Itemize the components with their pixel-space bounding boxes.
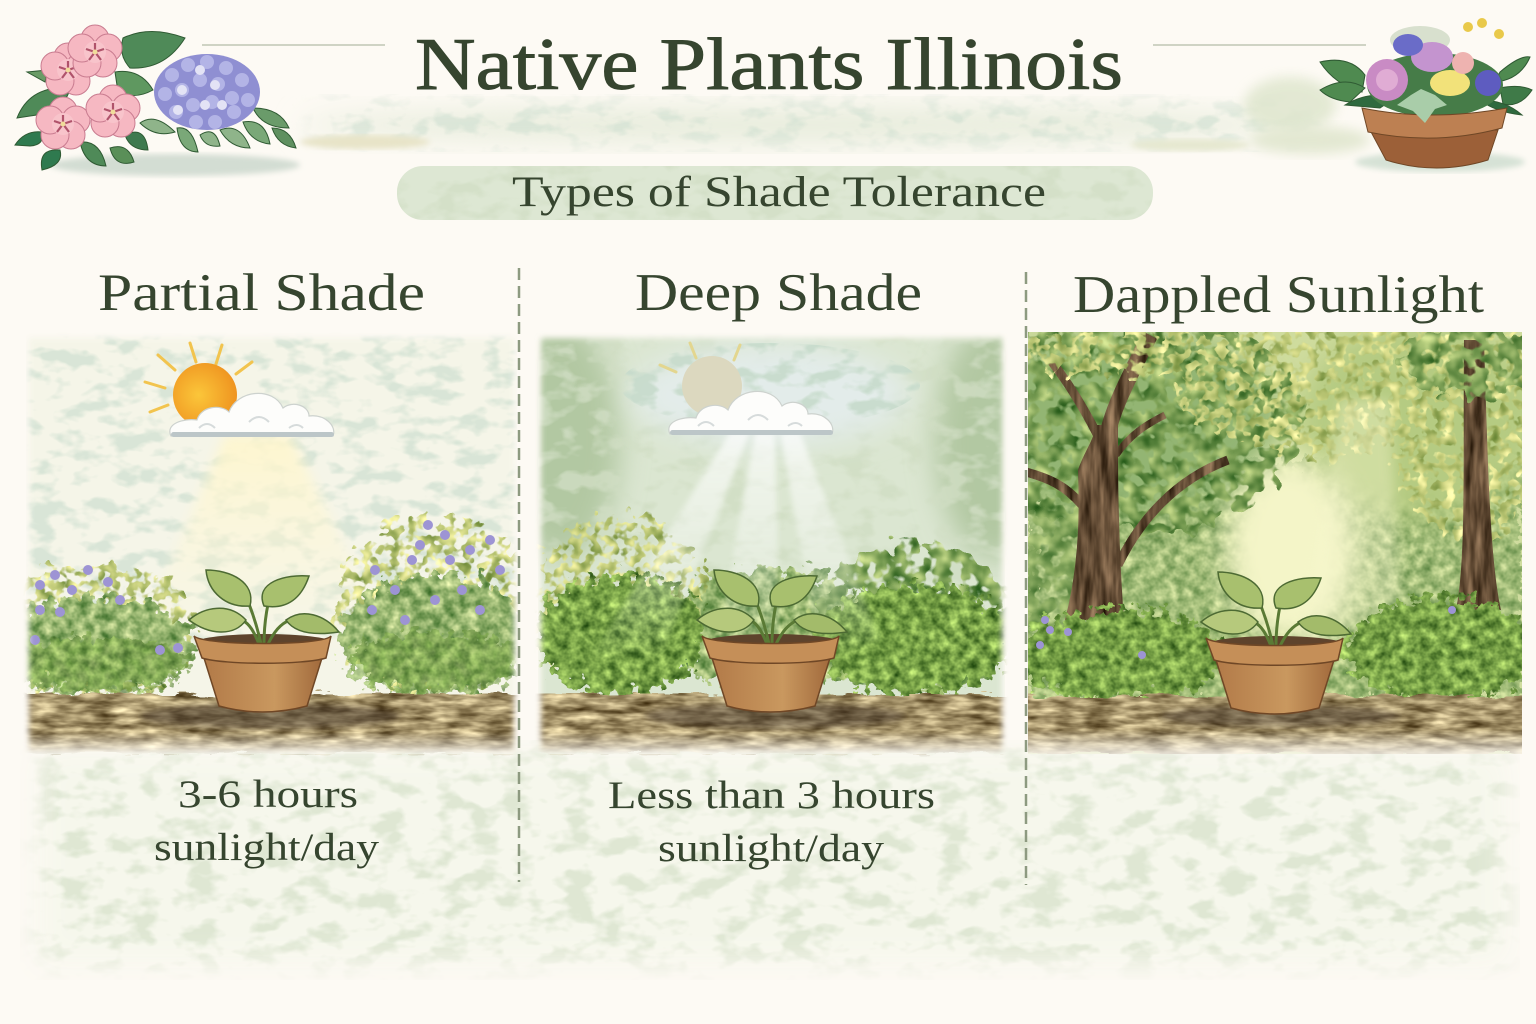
ground xyxy=(532,694,1012,754)
text: hours of sunlight: sunlight/day xyxy=(658,827,885,870)
divider xyxy=(1025,272,1027,885)
panel: deep shade xyxy=(536,273,1007,870)
subtitle pill: Types of Shade Tolerance xyxy=(512,169,1046,216)
misty foliage xyxy=(500,320,1055,592)
text: hours of sunlight: Less than 3 hours xyxy=(608,774,935,817)
illustration: deep shade scene xyxy=(536,334,1007,757)
canopy xyxy=(1028,332,1522,638)
text: hours of sunlight xyxy=(608,774,935,870)
blooms xyxy=(1397,89,1447,123)
purple flowers xyxy=(35,525,500,650)
potted plant xyxy=(189,570,339,712)
title rules xyxy=(202,44,1366,46)
ground xyxy=(20,694,525,754)
panel: partial shade xyxy=(0,264,535,869)
illustration: dappled forest scene xyxy=(1028,332,1522,754)
icon: hydrangea xyxy=(154,54,260,130)
heading: partial shade: Partial Shade xyxy=(98,264,425,322)
sun rays beam xyxy=(169,437,352,604)
leaves xyxy=(15,32,296,170)
corner illustration: flower pot xyxy=(1320,23,1532,172)
sun rays beam xyxy=(606,435,876,646)
sun beams xyxy=(1300,400,1400,660)
soft canopy underlay xyxy=(1028,332,1522,532)
title: Native Plants Illinois xyxy=(415,24,1123,106)
leaves xyxy=(1320,57,1532,115)
panel: dappled sunlight xyxy=(1028,275,1522,754)
bushes xyxy=(535,515,1015,695)
undergrowth xyxy=(1015,598,1535,702)
text: hours of sunlight: sunlight/day xyxy=(154,826,380,869)
text: hours of sunlight: 3-6 hours xyxy=(178,773,358,816)
icon: sun with cloud xyxy=(145,343,334,437)
icon: pink flowers xyxy=(36,25,140,149)
icon: pale sun with cloud xyxy=(660,343,833,435)
header landscape wash xyxy=(280,77,1370,160)
bushes xyxy=(0,515,535,698)
potted plant xyxy=(697,570,847,712)
pot xyxy=(1370,130,1498,168)
heading: deep shade: Deep Shade xyxy=(635,264,922,322)
corner illustration: flowers xyxy=(15,25,300,176)
heading: dappled sunlight: Dappled Sunlight xyxy=(1073,266,1484,324)
mottled watercolour lower wash xyxy=(20,740,1520,980)
purple flowers xyxy=(1040,610,1452,655)
subtitle pill xyxy=(397,166,1153,220)
divider xyxy=(518,268,520,882)
potted plant xyxy=(1201,572,1351,714)
foliage over branches xyxy=(1020,326,1536,398)
illustration: partial shade scene xyxy=(0,332,535,754)
ground xyxy=(1022,696,1527,754)
tree trunks xyxy=(1026,335,1501,620)
light glow xyxy=(1225,455,1355,645)
text: hours of sunlight xyxy=(154,773,380,869)
